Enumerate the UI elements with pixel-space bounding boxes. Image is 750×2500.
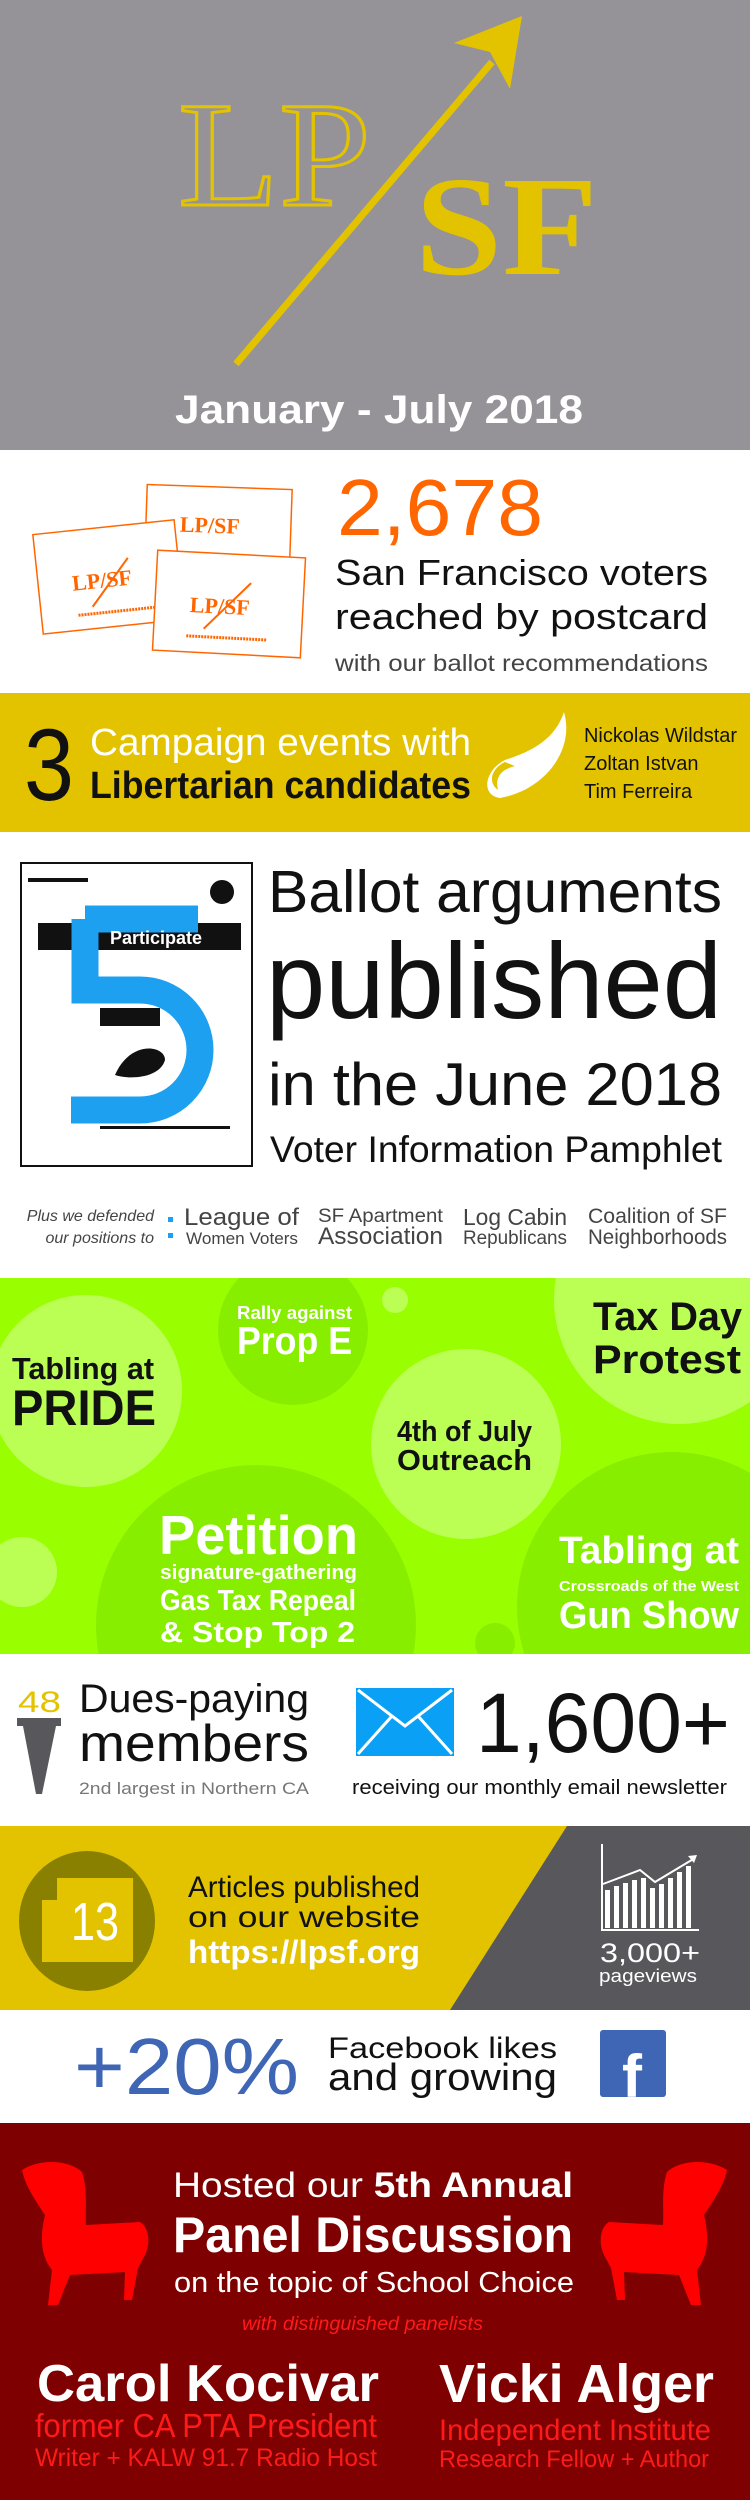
event: Gun Show: Crossroads of the West <box>559 1578 739 1595</box>
icon: postcards: LP/SF <box>179 512 240 539</box>
text: voters reached: with our ballot recommendations <box>334 650 708 676</box>
icon: pillar <box>17 1718 61 1794</box>
event: Petition: & Stop Top 2 <box>160 1617 355 1649</box>
icon: chair left <box>22 2162 148 2305</box>
panel: events <box>0 1278 750 1654</box>
text: facebook likes: Facebook likes <box>328 2032 557 2065</box>
arrow <box>236 16 522 364</box>
text: ballot arguments published: in the June 2018 <box>268 1051 722 1118</box>
icon: postcards: LP/SF <box>189 592 250 620</box>
panel: panel discussion <box>0 2123 750 2500</box>
text: defended positions: Neighborhoods <box>588 1226 727 1249</box>
text: candidate names: Zoltan Istvan <box>584 753 699 775</box>
event: Gun Show: Tabling at <box>559 1530 739 1572</box>
text: voters reached: reached by postcard <box>335 596 708 637</box>
stat: 1,600+: 1,600+ <box>476 1676 730 1770</box>
stat: +20%: +20% <box>74 2022 299 2111</box>
text: defended positions: Association <box>318 1223 443 1250</box>
text: articles published: https://lpsf.org <box>188 1934 420 1970</box>
event: Petition: signature-gathering <box>160 1562 357 1584</box>
panel: members and newsletter <box>0 1654 750 1826</box>
event: Tax Day Protest <box>593 1295 743 1382</box>
panelist: Vicki Alger: Independent Institute <box>439 2414 711 2447</box>
text: ballot arguments published: Ballot arguments <box>268 859 722 925</box>
text: defended positions: SF Apartment <box>318 1206 444 1227</box>
panel: header <box>0 0 750 450</box>
text: candidate names: Tim Ferreira <box>584 781 693 803</box>
text: voters reached <box>334 552 708 676</box>
text: candidate names: Nickolas Wildstar <box>584 725 737 747</box>
stat: pageviews <box>599 1938 700 1986</box>
text: defended positions: Plus we defended <box>27 1208 155 1225</box>
text: members <box>79 1677 310 1798</box>
event: Gun Show: Gun Show <box>559 1595 739 1637</box>
text: campaign events: Campaign events with <box>90 722 471 764</box>
stat: 48: 48 <box>18 1686 61 1719</box>
icon: envelope <box>356 1688 454 1756</box>
icon: facebook: f <box>622 2043 643 2110</box>
panel: facebook <box>0 2010 750 2123</box>
event: Rally against Prop E <box>237 1303 352 1363</box>
text: members: 2nd largest in Northern CA <box>79 1779 310 1798</box>
icon: postcards <box>33 485 306 658</box>
text: defended positions: Coalition of SF <box>588 1205 727 1228</box>
stat: pageviews: pageviews <box>599 1966 697 1986</box>
stat: pageviews: 3,000+ <box>600 1938 700 1968</box>
panel: articles <box>0 1826 750 2010</box>
event: Gun Show <box>559 1530 739 1637</box>
text: members: Dues-paying <box>79 1677 309 1721</box>
text: defended positions: Women Voters <box>186 1229 298 1248</box>
panelist: Vicki Alger: Research Fellow + Author <box>439 2446 709 2473</box>
panel: ballot arguments <box>0 832 750 1278</box>
event: Tabling at PRIDE <box>12 1351 156 1436</box>
text: panel discussion heading <box>173 2166 574 2299</box>
event: Tax Day Protest: Protest <box>593 1338 741 1382</box>
icon: articles 13 <box>19 1851 155 1991</box>
panelist: Vicki Alger: Vicki Alger <box>439 2354 714 2414</box>
image: pamphlet with 5: Participate <box>110 928 202 948</box>
text: panel discussion heading: Hosted our 5th Annual <box>173 2166 573 2205</box>
event: Rally against Prop E: Prop E <box>237 1320 352 1363</box>
text: defended positions: Log Cabin <box>463 1204 567 1230</box>
date heading: January - July 2018 <box>175 388 583 432</box>
event: Tabling at PRIDE: PRIDE <box>12 1380 156 1436</box>
logo: SF: SF <box>415 147 598 305</box>
text: voters reached: San Francisco voters <box>335 552 708 593</box>
text: defended positions: Republicans <box>463 1228 567 1249</box>
text: defended positions: League of <box>184 1204 299 1231</box>
text: ballot arguments published <box>266 859 723 1170</box>
text: newsletter: receiving our monthly email newsletter <box>352 1777 727 1799</box>
logo: LP outline: LP <box>178 72 371 238</box>
icon: facebook <box>600 2030 666 2110</box>
panel: postcards <box>0 450 750 693</box>
text: members: members <box>79 1715 309 1773</box>
text: ballot arguments published: published <box>266 920 722 1041</box>
text: defended positions: our positions to <box>45 1230 154 1247</box>
event: Petition: Petition <box>159 1504 358 1566</box>
event: Petition: Gas Tax Repeal <box>160 1585 356 1617</box>
text: panel discussion heading: Panel Discussion <box>173 2207 573 2263</box>
panel: campaign events <box>0 693 750 832</box>
icon: chair right <box>601 2162 727 2305</box>
text: articles published: on our website <box>188 1901 420 1934</box>
text: campaign events: Libertarian candidates <box>90 765 471 807</box>
panelist: Carol Kocivar <box>35 2355 379 2472</box>
text: defended positions <box>27 1204 727 1250</box>
text: articles published: Articles published <box>188 1871 420 1904</box>
text: panelists intro: with distinguished panelists <box>242 2314 484 2335</box>
text: candidate names <box>584 725 737 803</box>
icon: postcards: LP/SF <box>71 565 133 596</box>
text: panel discussion heading: on the topic of School Choice <box>174 2267 574 2299</box>
text: campaign events <box>90 722 471 807</box>
panelist: Carol Kocivar: Carol Kocivar <box>37 2355 379 2413</box>
event: 4th of July Outreach: 4th of July <box>397 1416 532 1448</box>
panelist: Vicki Alger <box>439 2354 714 2473</box>
panelist: Carol Kocivar: Writer + KALW 91.7 Radio Host <box>35 2444 377 2472</box>
icon: articles 13: 13 <box>71 1892 119 1952</box>
text: ballot arguments published: Voter Information Pamphlet <box>270 1129 723 1170</box>
event: Petition <box>159 1504 358 1649</box>
stat: 2,678: 2,678 <box>337 463 543 552</box>
text: facebook likes <box>328 2032 557 2099</box>
event: Tabling at PRIDE: Tabling at <box>12 1351 154 1386</box>
icon: bar chart <box>601 1844 699 1931</box>
icon: wing <box>487 712 566 798</box>
event: Rally against Prop E: Rally against <box>237 1303 352 1323</box>
text: articles published <box>188 1871 420 1970</box>
event: 4th of July Outreach <box>397 1416 532 1477</box>
text: facebook likes: and growing <box>328 2057 557 2099</box>
panelist: Carol Kocivar: former CA PTA President <box>35 2407 377 2444</box>
image: pamphlet with 5 <box>21 863 252 1166</box>
stat: 3: 3 <box>24 708 74 822</box>
event: Tax Day Protest: Tax Day <box>593 1295 743 1339</box>
event: 4th of July Outreach: Outreach <box>397 1445 532 1477</box>
